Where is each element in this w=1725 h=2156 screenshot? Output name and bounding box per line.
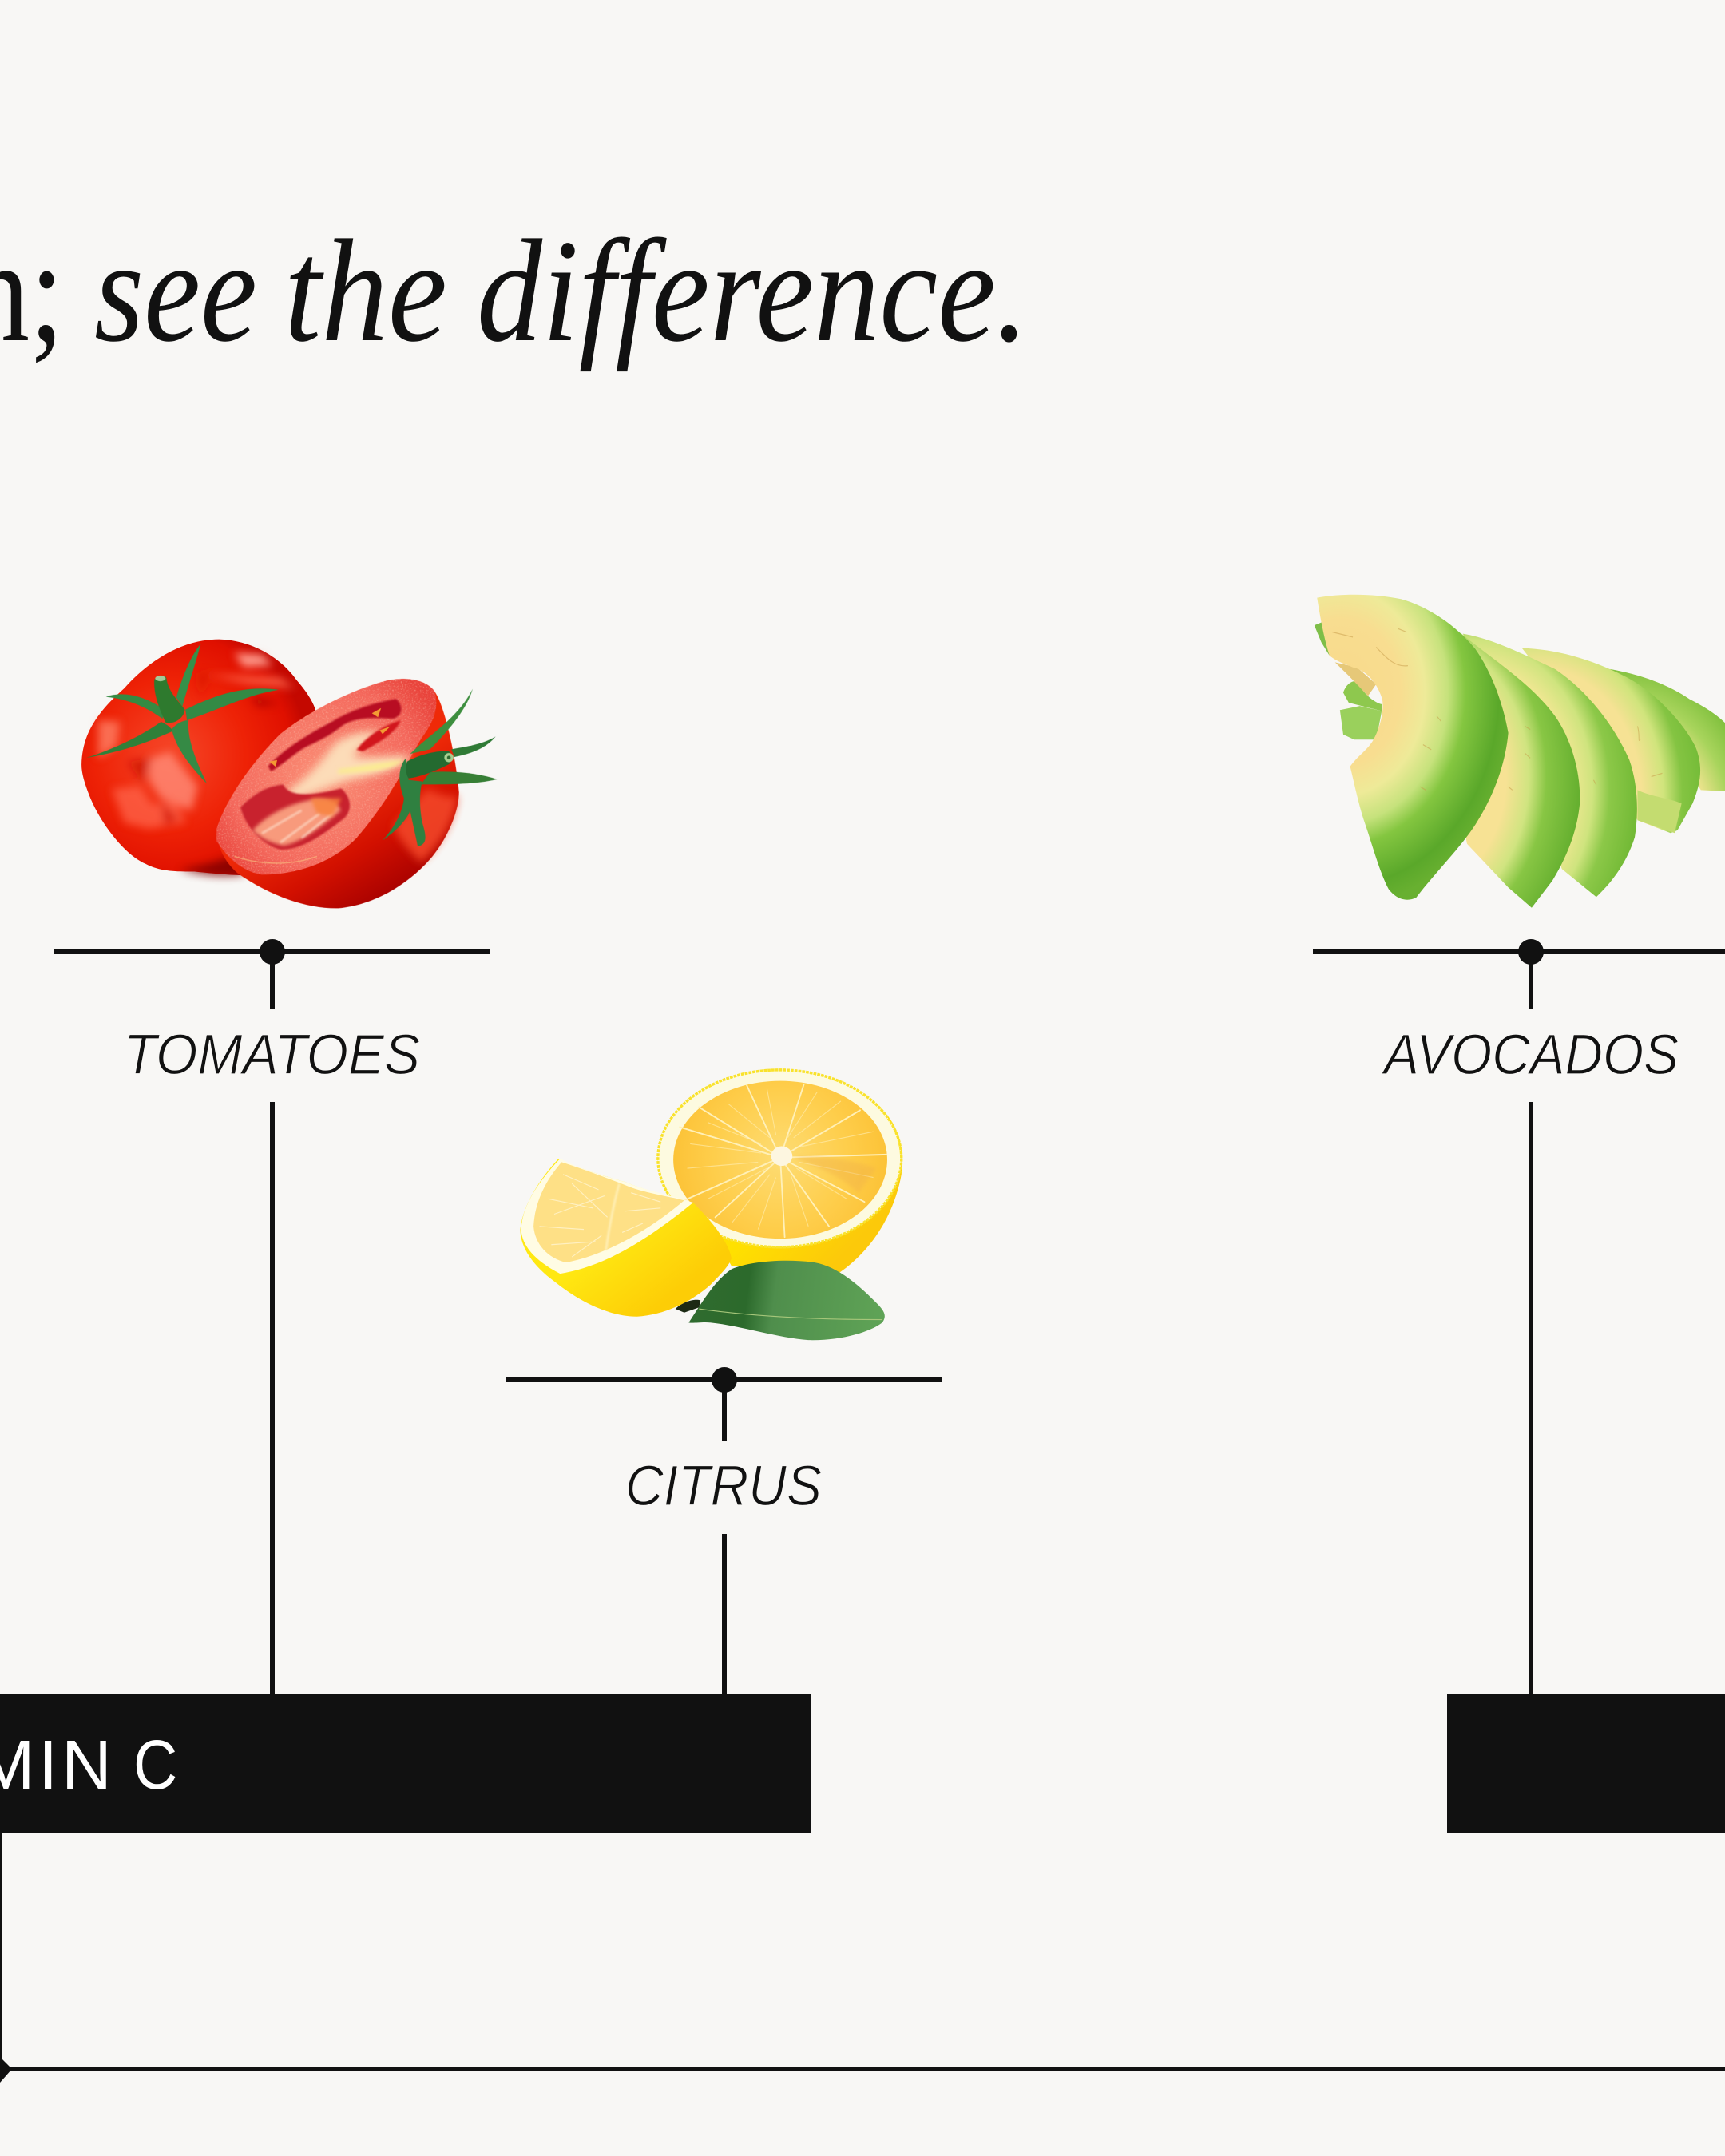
lemon wedge (520, 1159, 732, 1317)
lemon half (658, 1070, 902, 1274)
connector: citrus to vitamin c (722, 1534, 727, 1694)
title: difference. (477, 209, 1029, 372)
cut tomato (216, 679, 459, 908)
icon: tomatoes (81, 640, 498, 908)
title (0, 209, 1029, 372)
title: the (284, 209, 447, 372)
lemon leaf (676, 1261, 885, 1340)
slice 3 (1463, 634, 1637, 897)
label: tomatoes: TOMATOES (124, 1024, 420, 1087)
slice 4 (1522, 648, 1700, 833)
connector: avocados to bar (1529, 1102, 1533, 1694)
whole tomato (81, 640, 317, 876)
connector: bracket with diamond node (0, 1833, 1725, 2083)
sepals (86, 644, 279, 783)
avocados divider with dot (1313, 939, 1725, 1009)
connector: tomatoes to vitamin c (270, 1102, 275, 1694)
slice 5 (1610, 669, 1725, 791)
bar: vitamin c: C (133, 1726, 177, 1804)
back fragments (1343, 681, 1382, 711)
upper seed cavity (268, 699, 401, 771)
avocado slices (1315, 595, 1725, 908)
slice 2 (1448, 634, 1580, 908)
bar: vitamin c (0, 1694, 811, 1833)
core (289, 731, 411, 801)
slice 1 (1317, 595, 1509, 900)
icon: citrus (520, 1070, 902, 1340)
label: avocados: AVOCADOS (1381, 1024, 1679, 1087)
bar: right (text off-canvas) (1447, 1694, 1725, 1833)
tomatoes divider with dot (54, 939, 490, 1009)
label: citrus: CITRUS (625, 1455, 822, 1518)
title: see (94, 209, 257, 372)
citrus divider with dot (506, 1367, 942, 1441)
icon: avocados (1315, 595, 1725, 908)
lower seed cavity (240, 784, 350, 850)
